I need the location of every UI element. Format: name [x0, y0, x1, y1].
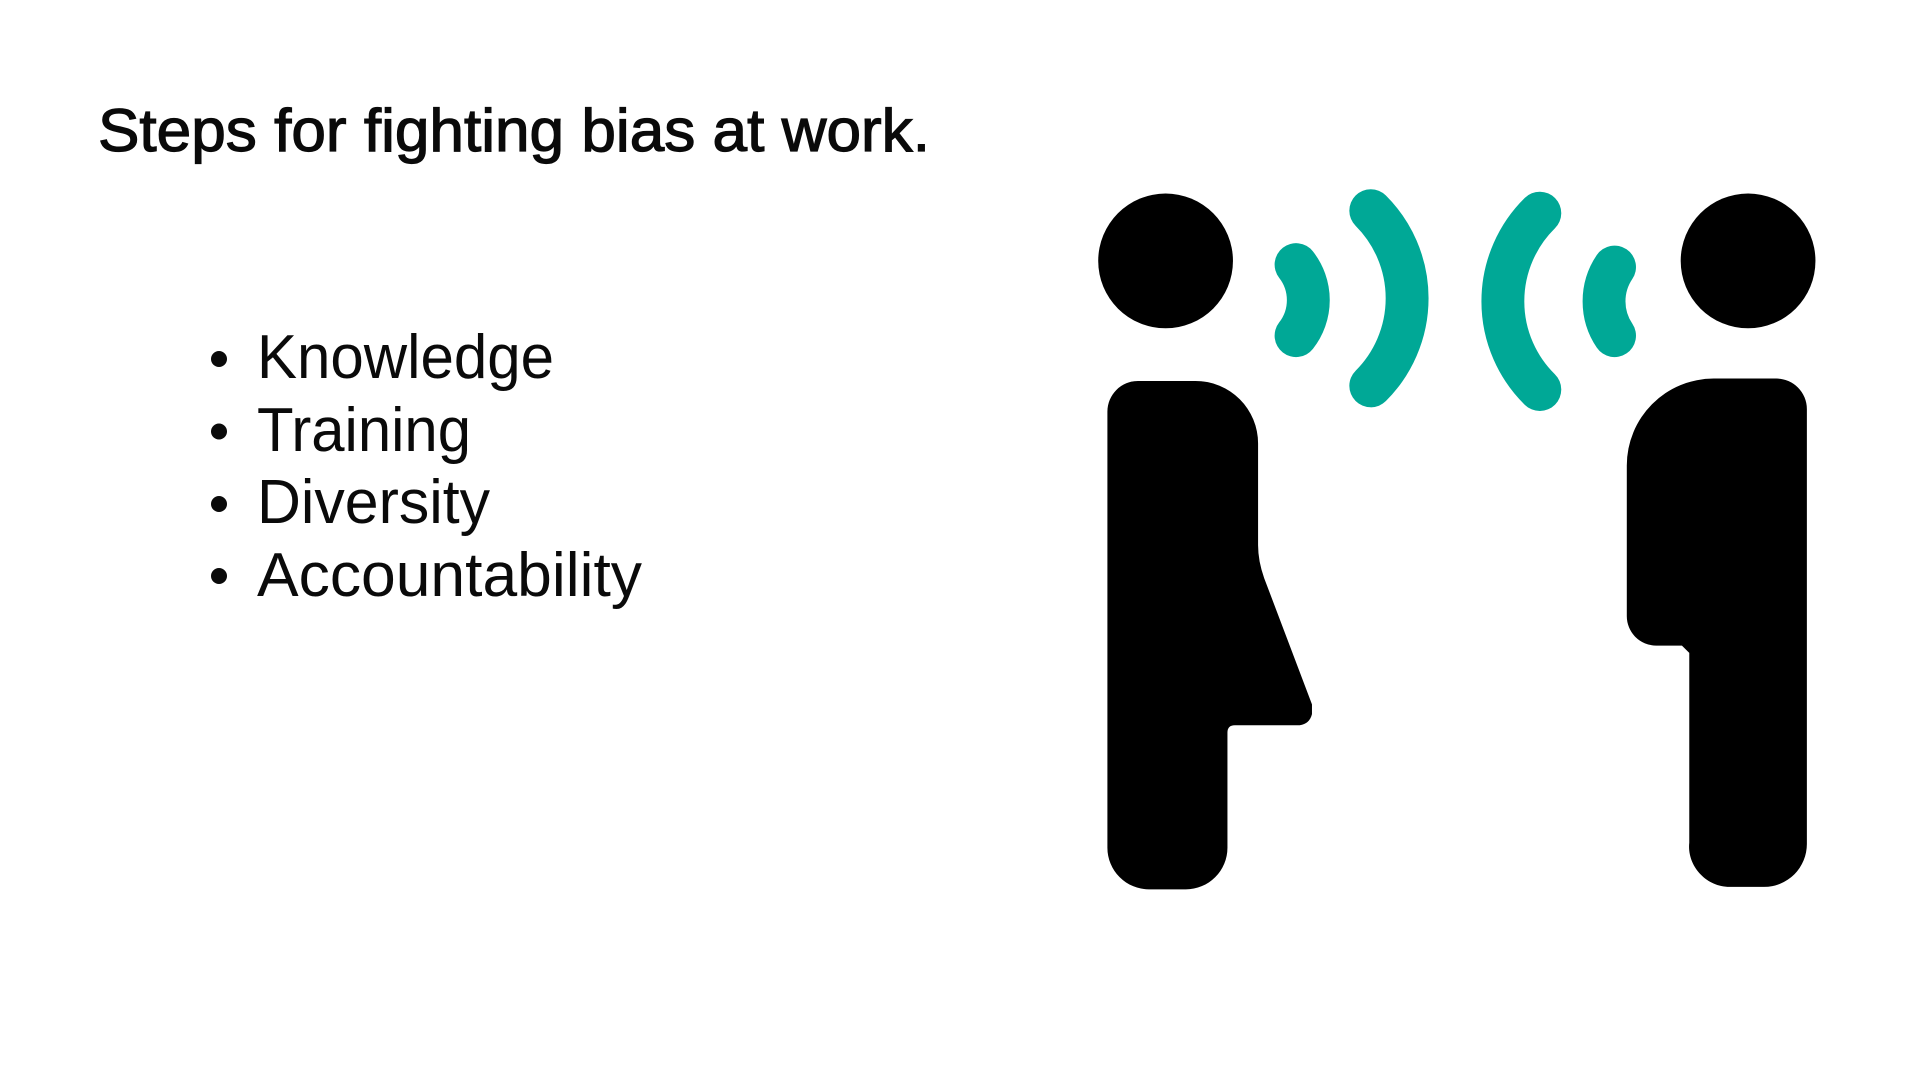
- bullet item: Accountability: Accountability: [257, 541, 642, 610]
- bullet item: Training: Training: [257, 396, 471, 465]
- icon: sound waves from right person: [1503, 213, 1615, 390]
- bullet item: Diversity: Diversity: [257, 468, 490, 537]
- illustration: two people talking: [1098, 194, 1815, 889]
- icon: right person: [1627, 194, 1815, 887]
- bullet item: Knowledge: Knowledge: [257, 323, 554, 392]
- icon: left person: [1098, 194, 1312, 889]
- icon: sound waves from left person: [1296, 211, 1407, 386]
- title: Steps for fighting bias at work.: [98, 97, 930, 164]
- bullet list: [211, 323, 642, 610]
